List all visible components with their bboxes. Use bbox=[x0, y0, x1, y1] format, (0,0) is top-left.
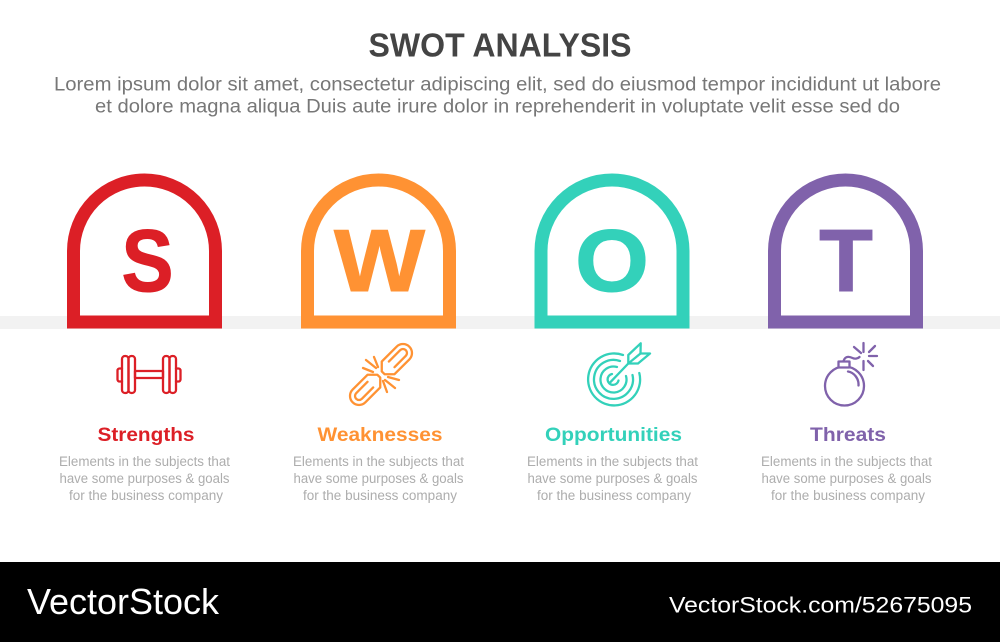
heading: Threats: Threats bbox=[810, 425, 886, 446]
description bbox=[761, 454, 932, 503]
panel: opportunities bbox=[527, 180, 698, 503]
description: Elements in the subjects that bbox=[761, 454, 932, 469]
subtitle text: et dolore magna aliqua Duis aute irure dolor in reprehenderit in voluptate velit esse sed do bbox=[95, 96, 900, 118]
description bbox=[293, 454, 464, 503]
description: Elements in the subjects that bbox=[527, 454, 698, 469]
footer bar bbox=[0, 562, 1000, 642]
description bbox=[527, 454, 698, 503]
badge: S bbox=[74, 180, 216, 322]
description: for the business company bbox=[771, 488, 925, 503]
badge: O: O bbox=[575, 211, 649, 310]
icon: target with arrow bbox=[588, 343, 650, 405]
description bbox=[59, 454, 230, 503]
panel: strengths bbox=[59, 180, 230, 503]
badge: W: W bbox=[334, 211, 425, 310]
description: Elements in the subjects that bbox=[293, 454, 464, 469]
badge: W bbox=[308, 180, 450, 322]
description: have some purposes & goals bbox=[60, 471, 230, 486]
panel: threats bbox=[761, 180, 932, 503]
badge: S: S bbox=[122, 211, 174, 310]
heading: Strengths: Strengths bbox=[98, 425, 194, 446]
heading: Weaknesses: Weaknesses bbox=[318, 425, 442, 446]
subtitle text bbox=[54, 74, 941, 118]
icon: dumbbell bbox=[118, 356, 180, 393]
icon: broken chain bbox=[346, 340, 416, 409]
heading: Opportunities: Opportunities bbox=[545, 425, 682, 446]
description: for the business company bbox=[303, 488, 457, 503]
description: for the business company bbox=[537, 488, 691, 503]
badge: T: T bbox=[819, 211, 873, 310]
description: Elements in the subjects that bbox=[59, 454, 230, 469]
description: have some purposes & goals bbox=[294, 471, 464, 486]
description: have some purposes & goals bbox=[762, 471, 932, 486]
description: for the business company bbox=[69, 488, 223, 503]
badge: T bbox=[774, 180, 916, 322]
description: have some purposes & goals bbox=[528, 471, 698, 486]
badge: O bbox=[541, 180, 683, 322]
icon: bomb bbox=[825, 343, 877, 406]
footer bar: VectorStock bbox=[27, 581, 220, 622]
title: SWOT ANALYSIS bbox=[368, 26, 632, 64]
footer bar: VectorStock.com/52675095 bbox=[669, 592, 972, 618]
panel: weaknesses bbox=[293, 180, 464, 503]
subtitle text: Lorem ipsum dolor sit amet, consectetur adipiscing elit, sed do eiusmod tempor incididunt ut labore bbox=[54, 74, 941, 96]
